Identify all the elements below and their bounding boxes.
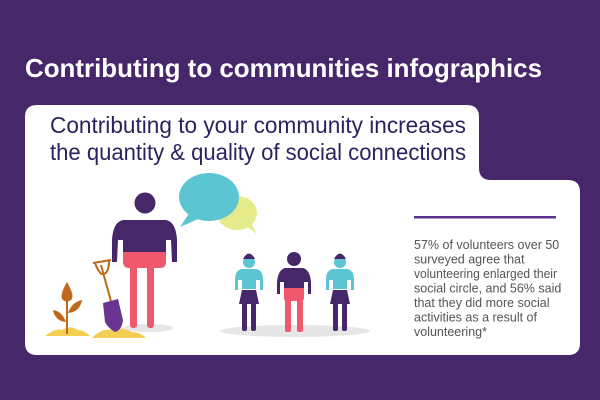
title: Contributing to communities infographics: [25, 53, 542, 83]
subtitle: [50, 112, 466, 165]
person: man centre: [277, 252, 311, 332]
stat text block: 57% of volunteers over 50: [414, 238, 559, 252]
panel: main white card: [25, 105, 580, 355]
stat text block: that they did more social: [414, 296, 550, 310]
icon: speech bubbles: [179, 173, 257, 234]
stat text block: surveyed agree that: [414, 252, 525, 266]
stat text block: volunteering enlarged their: [414, 267, 557, 281]
stat text block: volunteering*: [414, 325, 487, 339]
subtitle: Contributing to your community increases: [50, 112, 466, 138]
subtitle: the quantity & quality of social connections: [50, 139, 466, 165]
stat text block: social circle, and 56% said: [414, 282, 561, 296]
divider line above stat: [414, 216, 556, 218]
icon: group of three people: [220, 252, 370, 337]
person: woman right: [326, 254, 354, 331]
icon: large person: [112, 192, 177, 332]
icon: shovel: [92, 260, 146, 338]
stat text block: activities as a result of: [414, 310, 537, 324]
person: woman left: [235, 254, 263, 331]
stat text block: [414, 238, 561, 339]
icon: plant and soil: [45, 282, 90, 336]
